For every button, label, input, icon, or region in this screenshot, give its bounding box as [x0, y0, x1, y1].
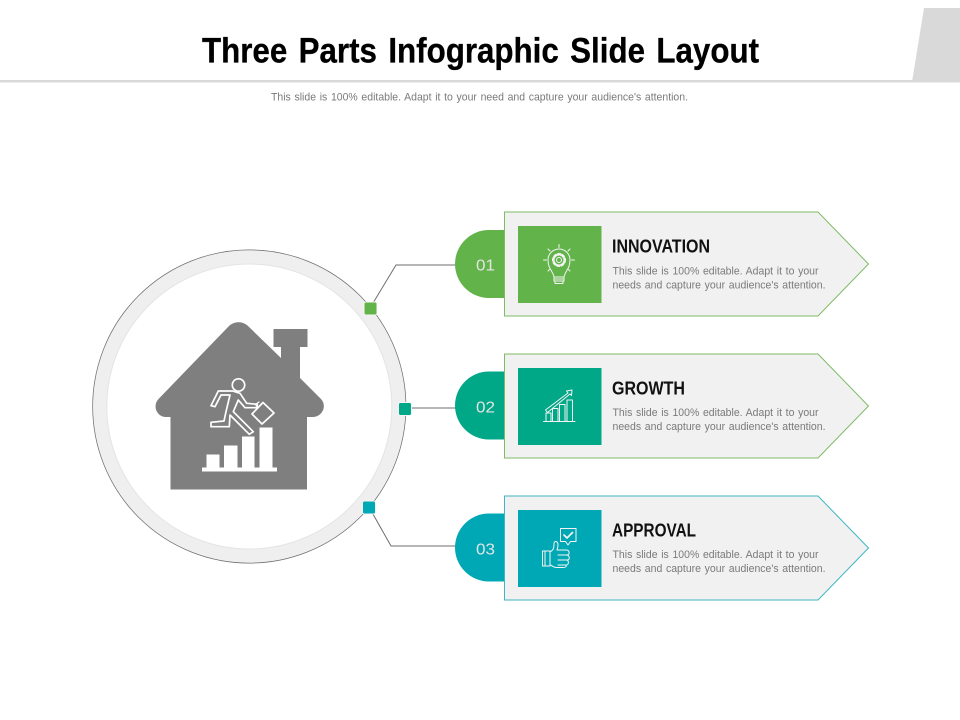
- marker: 03: [362, 501, 376, 514]
- house silhouette: [156, 322, 324, 490]
- description: needs and capture your audience's attention.: [612, 421, 826, 433]
- description: needs and capture your audience's attention.: [612, 563, 826, 575]
- panel: innovation: [455, 212, 868, 316]
- connector: 03: [369, 507, 456, 546]
- subtitle: This slide is 100% editable. Adapt it to your need and capture your audience's attention.: [271, 92, 688, 104]
- icon: thumbs up with check bubble: [542, 528, 576, 568]
- icon: light bulb with gear: [544, 244, 574, 284]
- arrow card: [504, 212, 868, 316]
- connector: 02: [405, 407, 456, 409]
- description: This slide is 100% editable. Adapt it to your: [612, 266, 819, 278]
- title: Three Parts Infographic Slide Layout: [202, 32, 759, 70]
- icon tile: [518, 368, 602, 445]
- panel: approval: [455, 496, 868, 600]
- heading: GROWTH: [612, 378, 685, 398]
- arrow card: [504, 496, 868, 600]
- icon tile: [518, 226, 602, 303]
- description: This slide is 100% editable. Adapt it to your: [612, 407, 819, 419]
- central circle: [93, 250, 406, 563]
- number tab 03: [455, 514, 505, 582]
- marker: 02: [398, 402, 412, 416]
- marker: 01: [364, 302, 377, 315]
- number tab 02: [455, 372, 505, 440]
- description: This slide is 100% editable. Adapt it to your: [612, 549, 819, 561]
- icon: house with climbing businessman: [156, 322, 324, 490]
- arrow card: [504, 354, 868, 458]
- description: needs and capture your audience's attention.: [612, 280, 826, 292]
- number 03: 03: [476, 542, 495, 558]
- icon tile: [518, 510, 602, 587]
- rising bars: [202, 428, 277, 472]
- running figure: [211, 379, 274, 434]
- connector: 01: [370, 265, 456, 308]
- header bar: [0, 8, 960, 82]
- number tab 01: [455, 230, 505, 298]
- number 02: 02: [476, 400, 495, 416]
- icon: growth chart with arrow: [544, 390, 575, 422]
- number 01: 01: [476, 258, 495, 274]
- panel: growth: [455, 354, 868, 458]
- heading: APPROVAL: [612, 520, 696, 540]
- heading: INNOVATION: [612, 236, 710, 256]
